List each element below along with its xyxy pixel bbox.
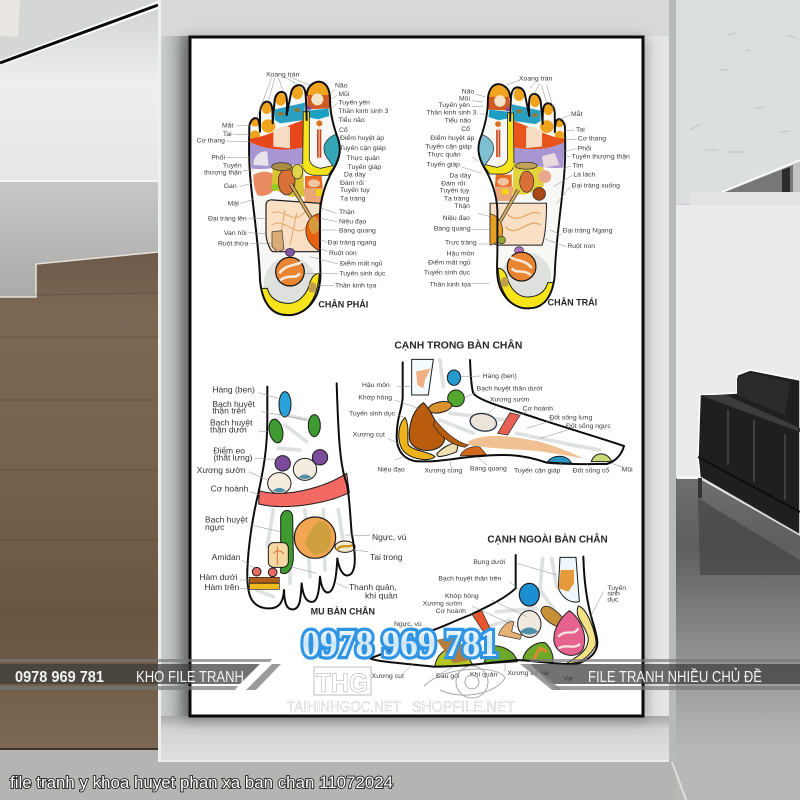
diaphragm band <box>259 473 349 507</box>
labels: mu bàn chân: Tai trong <box>370 552 403 562</box>
left foot labels: Thận <box>454 203 470 210</box>
left foot labels: Bàng quang <box>434 226 471 233</box>
yellow crescent <box>399 418 435 460</box>
labels: right foot: Thần kinh tọa <box>335 281 377 290</box>
heading: CẠNH TRONG BÀN CHÂN <box>394 338 522 351</box>
left foot labels: Thực quản <box>428 152 461 159</box>
window organ <box>558 557 579 602</box>
labels: mu bàn chân: Bạch huyệt <box>212 399 255 409</box>
stair rail <box>0 1 158 66</box>
sofa floor reflection <box>698 498 800 575</box>
left foot labels: Điểm huyệt áp <box>430 134 475 142</box>
right lower wall <box>676 205 800 480</box>
labels: cạnh trong: Bàng quang <box>470 465 507 472</box>
tonsil dots <box>252 567 261 576</box>
bone shading <box>440 360 600 450</box>
left foot labels: Xoang trán <box>519 75 553 82</box>
window triangle <box>725 162 800 192</box>
green ovals <box>267 418 285 444</box>
wall lower grey panel <box>0 181 158 301</box>
labels: cạnh ngoài: sinh <box>607 591 620 598</box>
labels: cạnh ngoài: Đầu gối <box>436 671 460 680</box>
right foot base shape <box>249 82 340 315</box>
upper grey ceiling above rail <box>0 0 158 60</box>
heading: mu bàn chân: MU BÀN CHÂN <box>311 605 375 616</box>
bone shading <box>453 558 557 637</box>
ceiling fixture <box>0 0 20 37</box>
left foot labels: CHÂN TRÁI <box>548 297 597 308</box>
green toe dome <box>591 454 612 462</box>
labels: cạnh ngoài: Khí quản <box>470 672 498 679</box>
bladder <box>460 447 487 456</box>
labels: right foot: Tuyến giáp <box>348 162 381 171</box>
right floor <box>676 478 800 750</box>
labels: cạnh trong: Hàng (bẹn) <box>483 373 517 380</box>
spine <box>468 436 583 458</box>
red diaphragm strip <box>498 413 520 435</box>
labels: cạnh ngoài: Ngực, vú <box>394 621 422 628</box>
labels: right foot: Ruột non <box>329 250 357 257</box>
labels: cạnh trong: Xương sườn <box>490 397 530 404</box>
yellow crescent <box>567 606 596 663</box>
labels: right foot: Điểm mất ngủ <box>340 258 383 267</box>
yellow spinal band <box>303 112 335 175</box>
poster artwork <box>197 71 633 683</box>
labels: right foot: Điểm huyệt áp <box>340 134 384 142</box>
red diaphragm strip <box>472 611 492 634</box>
leader lines <box>226 77 338 286</box>
window organ <box>412 359 433 395</box>
caption: file name: file tranh y khoa huyet phan xa ban chan 11072024 <box>10 774 393 792</box>
left foot labels: Điểm mất ngủ <box>428 258 471 267</box>
labels: right foot: Cơ thang <box>197 138 225 145</box>
labels: cạnh ngoài: Cơ hoành <box>436 608 466 615</box>
big toe <box>307 82 329 97</box>
labels: cạnh ngoài: Xương bả vai <box>507 670 549 677</box>
yellow heel crescent <box>261 273 319 315</box>
labels: mu bàn chân: ngực <box>205 522 225 532</box>
left foot illustration <box>478 84 565 308</box>
labels: right foot: Tuyến <box>223 160 242 169</box>
left foot labels: Tuyến tụy <box>440 186 470 195</box>
left foot labels: Thần kinh tọa <box>430 279 471 288</box>
rib shell <box>469 411 498 433</box>
labels: right foot: Dạ dày <box>344 172 366 179</box>
purple sleep dot <box>285 248 295 256</box>
left foot labels: Tạ tràng <box>444 195 470 202</box>
left foot labels: Tai <box>576 126 585 133</box>
labels: cạnh ngoài: Xương cụt <box>372 673 404 680</box>
labels: right foot: Đại tràng lên <box>208 216 247 223</box>
labels: right foot: Van hồi <box>224 228 247 237</box>
left foot labels: Cổ <box>461 125 470 133</box>
labels: right foot: Xoang trán <box>266 71 300 78</box>
tan oval <box>427 400 453 415</box>
skeleton shading <box>257 413 343 597</box>
labels: right foot: Tuyến cận giáp <box>339 143 386 152</box>
left foot labels: Niệu đạo <box>443 215 470 222</box>
labels: right foot: Bàng quang <box>339 228 376 235</box>
labels: cạnh trong: Đốt sống cổ <box>573 466 609 475</box>
panel: cạnh trong bàn chân (inner side) <box>349 338 633 475</box>
blue circle <box>519 583 539 606</box>
labels: right foot: Thực quản <box>347 155 380 162</box>
toe tips <box>250 86 303 140</box>
labels: cạnh trong: Xương cùng <box>424 468 462 475</box>
labels: right foot: Thận <box>339 209 355 216</box>
labels: right foot: thượng thận <box>204 170 242 177</box>
left foot labels: Phổi <box>578 144 592 152</box>
left foot labels: Tiểu não <box>445 117 471 125</box>
small tan bone <box>437 443 458 457</box>
labels: mu bàn chân: Xương sườn <box>197 465 246 475</box>
labels: mu bàn chân: Amidan <box>212 552 241 562</box>
phone number overlay: 0978 969 781 <box>302 623 498 665</box>
left foot labels: Dạ dày <box>449 173 472 180</box>
rib shell <box>518 611 541 637</box>
labels: right foot: Mắt <box>222 121 233 130</box>
wood stair panel <box>0 252 158 750</box>
reproductive circle <box>276 257 304 286</box>
labels: right foot: Gan <box>224 183 237 190</box>
labels: mu bàn chân: Điểm eo <box>213 446 245 456</box>
pink organ <box>554 611 585 655</box>
labels: mu bàn chân: thận trên <box>212 406 246 416</box>
abdomen organs <box>253 172 277 196</box>
labels: cạnh ngoài: Xương sườn <box>423 600 462 607</box>
left foot labels: Não <box>462 89 475 96</box>
blue oval <box>447 370 461 385</box>
labels: cạnh trong: Hậu môn <box>362 382 390 389</box>
teal dome <box>547 456 572 463</box>
labels: mu bàn chân: Hàm trên <box>204 582 240 592</box>
left foot labels: Tuyến cận giáp <box>425 142 472 151</box>
panel: left foot <box>424 75 630 308</box>
labels: right foot: Tạ tràng <box>340 195 366 202</box>
left foot labels: Cơ thang <box>578 136 606 143</box>
big brown organ <box>409 403 444 450</box>
stomach block <box>305 176 323 188</box>
labels: right foot: Mật <box>228 201 239 208</box>
labels: cạnh ngoài: Vai <box>563 676 573 683</box>
left foot labels: Tuyến thượng thận <box>572 151 630 160</box>
appendix <box>272 231 284 252</box>
labels: right foot: Niệu đạo <box>339 218 367 225</box>
labels: right foot: Ruột thừa <box>218 241 249 248</box>
labels: right foot: Tuyến yên <box>338 98 370 107</box>
panel: mu bàn chân (top of foot) <box>197 383 407 616</box>
labels: mu bàn chân <box>197 385 407 600</box>
left foot labels: Thần kinh sinh 3. <box>426 108 478 117</box>
labels: right foot: Đám rối <box>340 178 364 187</box>
labels: cạnh trong: Đốt sống lưng <box>549 412 592 421</box>
labels: mu bàn chân: khí quản <box>365 590 398 600</box>
labels: right foot: Đại tràng ngang <box>328 239 376 246</box>
labels: right foot: Tuyến tụy <box>340 185 370 194</box>
left foot labels: Đại tràng Ngang <box>563 228 613 235</box>
labels: cạnh ngoài: Khớp hông <box>445 593 479 600</box>
left foot labels: Mắt <box>571 109 582 118</box>
eye zone teal <box>275 103 305 123</box>
labels: cạnh trong: Bạch huyệt thân dưới <box>477 386 543 393</box>
intestine block <box>266 200 320 252</box>
poster drop shadow <box>182 38 646 720</box>
labels: mu bàn chân: Bạch huyệt <box>205 515 248 525</box>
lung purple band <box>249 142 303 169</box>
panel: right foot <box>197 71 389 315</box>
heading: CẠNH NGOÀI BÀN CHÂN <box>487 533 608 546</box>
labels: right foot: Tai <box>223 131 232 138</box>
neck shoulder red band <box>249 120 303 150</box>
left foot labels: Mũi <box>459 96 470 103</box>
logo: eye <box>424 666 505 698</box>
labels: right foot: Cổ <box>339 126 348 134</box>
left foot labels <box>424 75 630 308</box>
side foot outline <box>370 555 597 667</box>
green oval <box>448 390 464 407</box>
left wall with stair rail <box>0 0 158 181</box>
logo: taihinhgoc.net: TAIHINHGOC.NET <box>287 699 401 716</box>
heel shade <box>264 257 316 310</box>
left foot labels: Hậu môn <box>447 250 475 257</box>
throat rounded block <box>268 543 288 567</box>
labels: cạnh ngoài: Bụng dưới <box>473 559 506 566</box>
ureter <box>291 184 311 217</box>
labels: cạnh trong: Khớp hông <box>358 394 392 401</box>
left foot labels: Đám rối <box>441 179 465 188</box>
labels: cạnh trong: Xương cụt <box>353 432 385 439</box>
labels: mu bàn chân: Hàng (bẹn) <box>212 385 255 395</box>
labels: right foot: Tuyến sinh dục <box>339 268 386 277</box>
logo: THG: THG <box>316 668 368 698</box>
watermark banner: left <box>0 659 281 690</box>
sash organ <box>433 420 468 447</box>
labels: mu bàn chân: (thắt lưng) <box>213 453 253 463</box>
orange chest circle <box>294 517 336 558</box>
purple circles <box>275 456 290 471</box>
left foot labels: Tim <box>572 162 584 169</box>
labels: cạnh ngoài: Tuyến <box>607 583 626 592</box>
banner text: phone: 0978 969 781 <box>15 669 104 686</box>
labels: cạnh trong: Tuyến cận giáp <box>514 466 561 475</box>
right foot outline <box>249 82 340 315</box>
labels: right foot: Não <box>335 82 348 89</box>
labels: mu bàn chân: Bạch huyệt <box>210 418 253 428</box>
labels: mu bàn chân: Hàm dưới <box>199 572 238 582</box>
rib shells <box>293 458 317 480</box>
labels: cạnh ngoài: dục <box>607 597 619 604</box>
tan organ <box>541 606 564 628</box>
labels: right foot: Phổi <box>211 153 225 161</box>
left foot labels: Đại tràng xuống <box>572 180 620 189</box>
left foot labels: Ruột non <box>567 243 595 250</box>
labels: right foot: Tiểu não <box>338 116 365 124</box>
labels: cạnh trong <box>349 373 633 475</box>
labels: cạnh ngoài <box>372 559 626 683</box>
labels: mu bàn chân: Ngực, vú <box>372 532 407 542</box>
watermark banner: right <box>520 659 800 690</box>
labels: mu bàn chân: thận dưới <box>210 424 247 434</box>
side foot outline <box>397 360 624 464</box>
labels: cạnh trong: Niệu đạo <box>377 466 405 473</box>
long green lymph <box>281 510 293 574</box>
left foot labels: Tuyến yên <box>438 100 470 109</box>
right upper textured wall <box>676 0 800 204</box>
labels: mu bàn chân: Cơ hoành <box>211 484 249 494</box>
poster frame <box>190 37 643 716</box>
left foot labels: Lá lách <box>573 172 596 179</box>
banner text: kho file tranh: KHO FILE TRANH <box>136 669 244 686</box>
tan bone <box>498 621 522 639</box>
labels: cạnh trong: Mũi <box>622 467 633 474</box>
left foot labels: Tuyến sinh dục <box>424 268 471 277</box>
logo: shopfile.net: SHOPFILE.NET <box>412 699 515 716</box>
left foot labels: Tuyến giáp <box>426 159 460 168</box>
green domes <box>435 647 473 666</box>
labels: right foot: Thần kinh sinh 3 <box>338 106 389 115</box>
banner text: file tranh nhiều chủ đề: FILE TRANH NHIỀU CHỦ ĐỀ <box>588 668 762 686</box>
panel: cạnh ngoài bàn chân (outer side) <box>370 533 626 683</box>
labels: cạnh trong: Cơ hoành <box>523 405 553 412</box>
bladder <box>306 213 320 252</box>
heading: chân phải: CHÂN PHẢI <box>318 298 368 309</box>
blue oval: hàng <box>279 392 291 417</box>
labels: mu bàn chân: Thanh quản, <box>349 582 397 592</box>
neck spine <box>316 120 322 126</box>
dorsal foot outline <box>247 383 355 609</box>
labels: cạnh ngoài: Bạch huyệt thân trên <box>438 575 502 582</box>
sofa <box>698 370 800 535</box>
parathyroid teal half circle <box>324 134 340 167</box>
labels: cạnh trong: Đốt sống ngực <box>566 421 611 430</box>
left foot labels: Trực tràng <box>445 239 477 246</box>
jaw bands <box>249 577 279 583</box>
inner ear oval <box>335 541 355 552</box>
floor <box>0 750 800 800</box>
middle wall <box>158 0 675 762</box>
labels: right foot <box>197 71 389 290</box>
labels: right foot: Mũi <box>338 91 350 98</box>
labels: cạnh trong: Tuyến sinh dục <box>349 409 396 418</box>
